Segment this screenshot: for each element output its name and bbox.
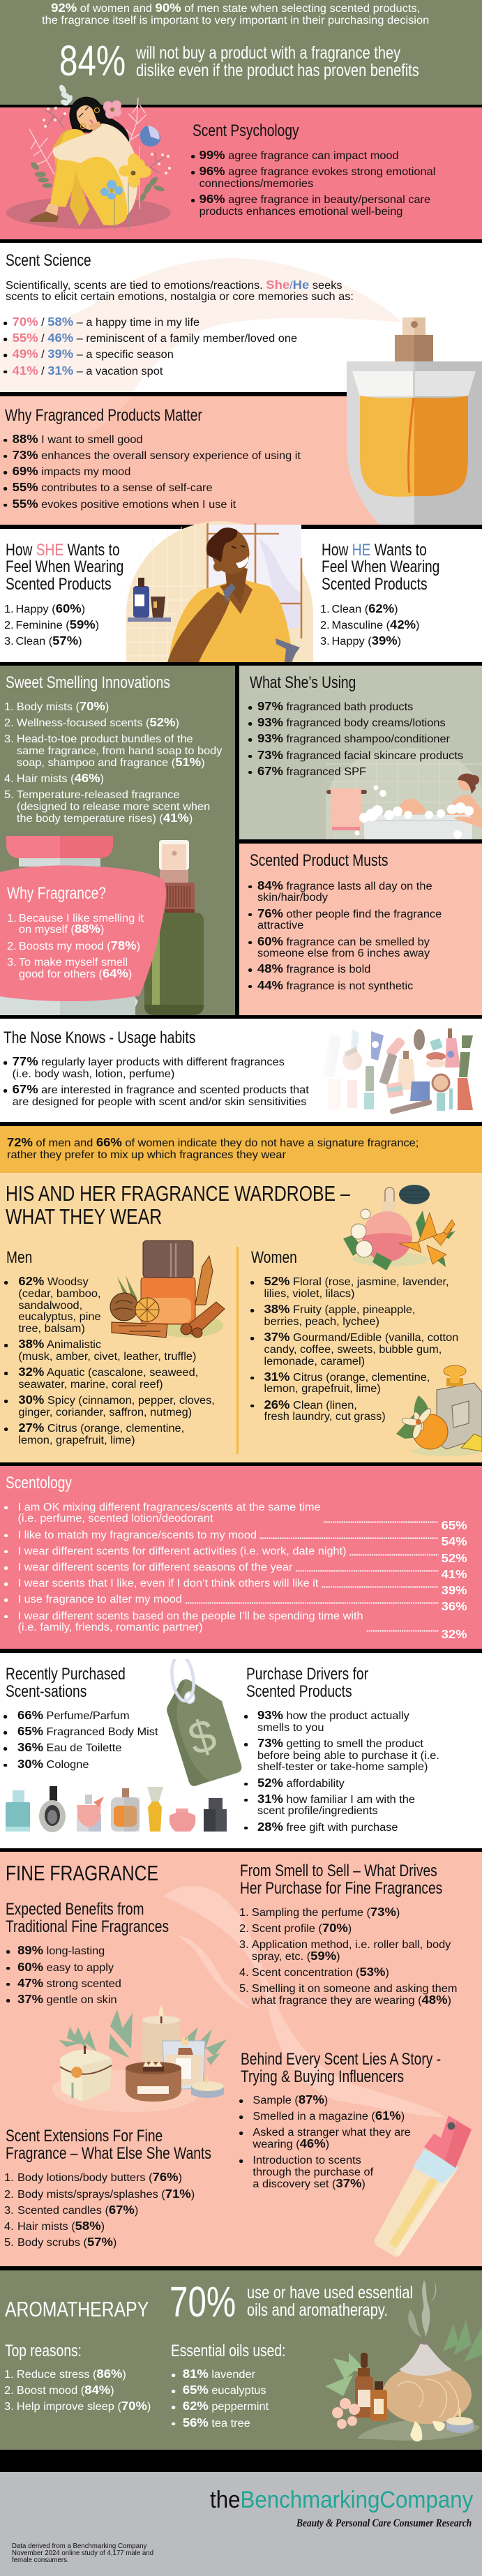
heading: behind every scent (241, 2051, 441, 2085)
list: recently purchased: 30% Cologne (17, 1757, 89, 1771)
illustration: row of perfume bottles (6, 1786, 227, 1832)
list: purchase factors: Scent concentration (53%) (252, 1965, 389, 1979)
list: innovations: 2. (4, 717, 14, 729)
list: psychology statistics: 96% agree fragrance in beauty/personal care (199, 192, 430, 206)
list: products used: 67% fragranced SPF (257, 764, 366, 778)
list: men's scents: 62% Woodsy (18, 1274, 89, 1288)
icon: dollar price tag (167, 1659, 241, 1786)
heading: purchase drivers: Scented Products (246, 1682, 352, 1701)
callout: signature fragrance statistic (0, 1126, 482, 1173)
list: why fragrance reasons: 1. (7, 913, 17, 924)
list: she and he memory statistics: 41% / 31% – a vacation spot (13, 364, 163, 377)
list: product musts: 44% fragrance is not synthetic (257, 978, 413, 992)
panel: why fragrance (0, 865, 166, 1001)
list: usage habits: (i.e. body wash, lotion, perfume) (13, 1068, 174, 1080)
list: why fragrance reasons: To make myself smell (19, 957, 128, 968)
heading: how she wants to feel (6, 541, 123, 594)
list: purchase drivers: scent profile/ingredients (257, 1805, 378, 1817)
heading: how he wants to feel: Scented Products (322, 575, 428, 594)
list: essential oils: 56% tea tree (183, 2416, 250, 2429)
list: scent extensions: 5. (4, 2237, 14, 2249)
list: psychology statistics: 99% agree fragrance can impact mood (199, 148, 399, 162)
list: products used: 73% fragranced facial skincare products (257, 748, 463, 762)
list: she feelings: 1. (4, 604, 14, 615)
heading: expected benefits (6, 1901, 169, 1935)
list: purchase factors (239, 1908, 457, 2012)
list: men's scents: 27% Citrus (orange, clementine, (18, 1421, 184, 1435)
list: scentology statements: 36% (441, 1599, 467, 1613)
list: usage habits: 67% are interested in fragrance and scented products that (13, 1082, 309, 1096)
panel: purchases and purchase drivers (0, 1653, 482, 1848)
list: product musts (248, 878, 442, 992)
heading: why fragranced products matter: Why Fragranced Products Matter (5, 406, 202, 425)
list: innovations: 3. (4, 733, 14, 745)
list: top reasons: 1. (4, 2369, 14, 2381)
background: scent swoosh (0, 258, 402, 392)
list: reasons: 69% impacts my mood (13, 464, 130, 478)
heading: from smell to sell (240, 1863, 442, 1897)
list: he feelings: 1. (320, 604, 330, 615)
list: purchase drivers: smells to you (257, 1722, 324, 1734)
heading: from smell to sell: Her Purchase for Fine Fragrances (240, 1879, 442, 1898)
heading: the nose knows: The Nose Knows - Usage habits (3, 1028, 195, 1047)
list: purchase factors: 4. (239, 1967, 249, 1979)
list: purchase factors: Smelling it on someone and asking them (252, 1983, 457, 1995)
list: scentology statements: (i.e. perfume, scented lotion/deodorant (17, 1513, 213, 1525)
list: usage habits: are designed for people with scent and/or skin sensitivities (13, 1096, 306, 1108)
list: product musts: attractive (257, 920, 303, 931)
heading: scent science: Scent Science (6, 251, 91, 270)
heading: fine fragrance: FINE FRAGRANCE (6, 1861, 158, 1885)
list: women's scents (250, 1274, 458, 1423)
list: she feelings: 2. (4, 620, 14, 631)
list: he feelings: 2. (320, 620, 330, 631)
text: signature fragrance: rather they prefer to mix up which fragrances they wear (7, 1149, 286, 1161)
list: she and he memory statistics (3, 315, 297, 377)
panel: scented product musts (239, 844, 482, 1015)
list: top reasons: 2. (4, 2385, 14, 2397)
list: men's scents: 30% Spicy (cinnamon, pepper, cloves, (18, 1393, 215, 1407)
list: influencers: a discovery set (37%) (253, 2176, 365, 2190)
list: product musts: someone else from 6 inches away (257, 948, 430, 959)
list: he feelings: Clean (62%) (331, 601, 398, 615)
text: essential oil use: oils and aromatherapy. (247, 2300, 387, 2320)
list: innovations: (designed to release more scent when (17, 801, 210, 813)
list: innovations: Hair mists (46%) (17, 771, 104, 785)
list: purchase factors: Sampling the perfume (73%) (252, 1905, 400, 1919)
list: he feelings (320, 601, 419, 647)
list: psychology statistics: 96% agree fragrance evokes strong emotional (199, 164, 435, 178)
heading: recently purchased scent-sations: Scent-sations (6, 1682, 86, 1701)
heading: how he wants to feel: Feel When Wearing (322, 557, 439, 576)
list: top reasons: 3. (4, 2401, 14, 2413)
text: source note: Data derived from a Benchmarking Company (12, 2542, 146, 2550)
list: why fragrance reasons (7, 913, 144, 980)
list: she feelings: Clean (57%) (15, 634, 82, 647)
list: she feelings (4, 601, 99, 647)
list: why fragrance reasons: 2. (7, 941, 17, 952)
text: essential oil use (247, 2284, 412, 2319)
list: scent extensions: 2. (4, 2188, 14, 2201)
list: women's scents: lemonade, caramel) (264, 1356, 365, 1368)
big number: 84%: 84% (59, 37, 126, 84)
list: purchase factors: spray, etc. (59%) (252, 1949, 340, 1963)
list: why fragrance reasons: on myself (88%) (19, 922, 104, 936)
text: source note: November 2024 online study of 4,177 male and (12, 2549, 153, 2557)
list: influencers (239, 2095, 410, 2195)
list: women's scents: lilies, violet, lilacs) (264, 1288, 354, 1300)
list: she and he memory statistics: 55% / 46% – reminiscent of a family member/loved one (13, 331, 297, 345)
list: she feelings: Feminine (59%) (15, 617, 99, 631)
icon: dollar price tag: $ (182, 1708, 222, 1765)
list: innovations: 4. (4, 773, 14, 785)
list: women's scents: berries, peach, lychee) (264, 1316, 379, 1328)
background: salmon swoosh (0, 396, 133, 442)
list: top reasons: Help improve sleep (70%) (17, 2399, 151, 2413)
list: scentology statements (4, 1502, 467, 1641)
list: innovations (4, 699, 222, 825)
heading: top reasons: Top reasons: (5, 2342, 82, 2360)
text: source note: female consumers. (12, 2556, 68, 2564)
list: psychology statistics: connections/memories (199, 178, 313, 190)
list: essential oils: 81% lavender (183, 2367, 255, 2381)
list: he feelings: Happy (39%) (331, 634, 401, 647)
list: expected benefits: 37% gentle on skin (17, 1992, 116, 2006)
list: innovations: the body temperature rises) (41%) (17, 811, 193, 825)
list: recently purchased (3, 1708, 158, 1771)
list: why fragrance reasons: 3. (7, 957, 17, 968)
list: usage habits (3, 1054, 309, 1108)
list: purchase factors: 3. (239, 1939, 249, 1951)
heading: recently purchased scent-sations (6, 1665, 125, 1701)
list: scentology statements: I like to match my fragrance/scents to my mood (17, 1529, 257, 1541)
illustration: man applying scent in bathroom (126, 521, 313, 662)
illustration: assorted cosmetics (331, 1028, 473, 1114)
list: recently purchased: 36% Eau de Toilette (17, 1740, 121, 1754)
list: scent extensions: Body scrubs (57%) (17, 2235, 116, 2249)
list: men's scents (4, 1274, 215, 1446)
heading: how he wants to feel (322, 541, 439, 594)
panel: scent psychology (0, 107, 482, 239)
heading: expected benefits: Traditional Fine Fragrances (6, 1917, 169, 1936)
list: scentology statements: 54% (441, 1534, 467, 1548)
list: influencers: wearing (46%) (253, 2136, 329, 2150)
heading: purchase drivers (246, 1665, 368, 1701)
list: products used: 97% fragranced bath products (257, 699, 413, 713)
list: women's scents: 31% Citrus (orange, clementine, (264, 1370, 430, 1384)
list: innovations: same fragrance, from hand soap to body (17, 745, 222, 757)
list: scentology statements: (i.e. family, friends, romantic partner) (17, 1622, 202, 1633)
list: top reasons: Boost mood (84%) (17, 2383, 114, 2397)
list: product musts: 84% fragrance lasts all day on the (257, 878, 432, 892)
list: why fragrance reasons: Boosts my mood (78%) (19, 938, 140, 952)
list: influencers: Asked a stranger what they are (253, 2127, 410, 2139)
list: men's scents: ginger, coriander, saffron, nutmeg) (18, 1407, 192, 1418)
list: scent extensions: 1. (4, 2172, 14, 2184)
list: products used (248, 699, 463, 778)
list: influencers: Introduction to scents (253, 2155, 361, 2166)
list: men's scents: 32% Aquatic (cascalone, seaweed, (18, 1365, 198, 1379)
list: top reasons: Reduce stress (86%) (17, 2367, 126, 2381)
list: purchase drivers: 31% how familiar I am with the (257, 1792, 415, 1806)
heading: purchase drivers: Purchase Drivers for (246, 1665, 368, 1684)
list: product musts: 48% fragrance is bold (257, 961, 370, 975)
heading: recently purchased scent-sations: Recently Purchased (6, 1665, 125, 1684)
list: why fragrance reasons: good for others (64%) (19, 966, 132, 980)
panel: his and her fragrance wardrobe (0, 1173, 482, 1462)
panel: aromatherapy (0, 2270, 482, 2450)
logo: the Benchmarking Company: theBenchmarkingCompany (210, 2487, 473, 2513)
heading: scent extensions: Fragrance – What Else She Wants (6, 2144, 211, 2163)
list: essential oils (172, 2369, 269, 2434)
heading: his and her fragrance wardrobe: HIS AND HER FRAGRANCE WARDROBE – (6, 1181, 349, 1206)
list: purchase drivers: 73% getting to smell the product (257, 1736, 423, 1750)
list: men's scents: tree, balsam) (18, 1323, 85, 1335)
list: innovations: Body mists (70%) (17, 699, 109, 713)
list: influencers: Sample (87%) (253, 2092, 328, 2106)
list: purchase drivers: 28% free gift with purchase (257, 1820, 398, 1834)
heading: sweet smelling innovations: Sweet Smelling Innovations (6, 673, 170, 692)
text: signature fragrance (7, 1135, 419, 1161)
list: reasons: 73% enhances the overall sensory experience of using it (13, 448, 301, 462)
panel: scentology (0, 1466, 482, 1649)
list: scentology statements: 39% (441, 1583, 467, 1597)
list: expected benefits: 47% strong scented (17, 1976, 121, 1990)
list: purchase factors: Application method, i.e. roller ball, body (252, 1939, 451, 1951)
list: scentology statements: I wear different scents based on the people I’ll be spending time with (17, 1610, 363, 1622)
list: women's scents: 26% Clean (linen, (264, 1398, 356, 1411)
illustration: diffuser and oil bottles (314, 2270, 482, 2450)
list: innovations: Head-to-toe product bundles of the (17, 733, 193, 745)
list: scent extensions: Body lotions/body butters (76%) (17, 2170, 182, 2184)
heading: behind every scent: Behind Every Scent Lies A Story - (241, 2050, 441, 2069)
list: scent extensions: Scented candles (67%) (17, 2203, 138, 2217)
list: scentology statements: I am OK mixing different fragrances/scents at the same time (17, 1502, 320, 1513)
list: expected benefits (6, 1946, 121, 2011)
list: reasons: 88% I want to smell good (13, 432, 143, 446)
list: scentology statements: 41% (441, 1567, 467, 1581)
list: women's scents: lemon, grapefruit, lime) (264, 1383, 380, 1395)
list: product musts: 76% other people find the fragrance (257, 906, 442, 920)
text: signature fragrance: 72% of men and 66% of women indicate they do not have a signature fragrance; (7, 1135, 419, 1149)
list: expected benefits: 60% easy to apply (17, 1959, 114, 1973)
list: scent extensions: 3. (4, 2205, 14, 2217)
list: men's scents: 38% Animalistic (18, 1337, 101, 1351)
list: scentology statements: I wear scents that I like, even if I don’t think others will like it (17, 1578, 318, 1589)
heading: why fragrance: Why Fragrance? (7, 884, 106, 903)
list: products used: 93% fragranced shampoo/conditioner (257, 731, 450, 745)
tagline: Beauty & Personal Care Consumer Research (296, 2517, 472, 2529)
heading: scent extensions: Scent Extensions For Fine (6, 2127, 163, 2146)
list: he feelings: Masculine (42%) (331, 617, 419, 631)
heading: his and her fragrance wardrobe (6, 1181, 350, 1229)
list: influencers: through the purchase of (253, 2166, 373, 2178)
list: men's scents: lemon, grapefruit, lime) (18, 1435, 135, 1446)
list: usage habits: 77% regularly layer products with different fragrances (13, 1054, 285, 1068)
panel: how she and he want to feel (0, 529, 482, 662)
divider: men and women (236, 1247, 239, 1454)
illustration: orange perfume with spices (110, 1241, 225, 1338)
text: fragrance importance statistic: 92% of women and 90% of men state when selecting scented products, (51, 1, 420, 15)
list: reasons (3, 432, 301, 511)
illustration: scented candles (49, 2002, 230, 2114)
heading: what she's using: What She’s Using (250, 673, 356, 692)
heading: scented product musts: Scented Product Musts (250, 851, 388, 870)
list: women's scents: 37% Gourmand/Edible (vanilla, cotton (264, 1330, 458, 1344)
list: recently purchased: 65% Fragranced Body Mist (17, 1724, 158, 1738)
list: purchase drivers: 93% how the product actually (257, 1708, 409, 1722)
list: innovations: 1. (4, 701, 14, 713)
list: men's scents: eucalyptus, pine (18, 1311, 101, 1323)
list: purchase drivers: before being able to purchase it (i.e. (257, 1750, 439, 1762)
text: scent science intro (6, 278, 353, 303)
list: scentology statements: 52% (441, 1550, 467, 1564)
list: innovations: Wellness-focused scents (52%) (17, 715, 179, 729)
illustration: woman hugging knees with flowers (6, 85, 171, 230)
illustration: woman in bubble bath (326, 748, 482, 839)
list: purchase factors: 5. (239, 1983, 249, 1995)
heading: how he wants to feel: How HE Wants to (322, 541, 427, 560)
list: product musts: skin/hair/body (257, 892, 328, 904)
list: scentology statements: I use fragrance to alter my mood (17, 1594, 181, 1605)
text: scent science intro: Scientifically, scents are tied to emotions/reactions. She/He seeks (6, 278, 342, 292)
text: scent science intro: scents to elicit certain emotions, nostalgia or core memories such as: (6, 291, 353, 303)
shape: pink jar label (0, 865, 166, 1001)
heading: his and her fragrance wardrobe: WHAT THEY WEAR (6, 1204, 162, 1229)
list: scentology statements: I wear different scents for different activities (i.e. work, date night) (17, 1545, 346, 1557)
list: men's scents: sandalwood, (18, 1300, 82, 1312)
list: innovations: Temperature-released fragrance (17, 789, 180, 801)
list: innovations: soap, shampoo and fragrance (51%) (17, 755, 205, 769)
heading: scent psychology: Scent Psychology (193, 121, 299, 140)
list: women's scents: candy, coffee, sweets, bubble gum, (264, 1344, 442, 1356)
list: scent extensions: Hair mists (58%) (17, 2219, 105, 2233)
list: psychology statistics (191, 148, 435, 218)
list: women's scents: 38% Fruity (apple, pineapple, (264, 1302, 415, 1316)
text: fragrance importance statistic (42, 1, 429, 27)
list: why fragrance reasons: Because I like smelling it (19, 913, 144, 924)
heading: essential oils used: Essential oils used: (171, 2342, 285, 2360)
list: innovations: 5. (4, 789, 14, 801)
list: products used: 93% fragranced body creams/lotions (257, 715, 446, 729)
list: scentology statements: 65% (441, 1518, 467, 1532)
list: recently purchased: 66% Perfume/Parfum (17, 1708, 130, 1722)
text: 84% description: will not buy a product with a fragrance they (136, 43, 400, 63)
list: purchase factors: Scent profile (70%) (252, 1921, 352, 1935)
big number: 70%: 70% (170, 2278, 236, 2326)
panel: why fragranced products matter (0, 396, 482, 525)
heading: scentology: Scentology (6, 1474, 71, 1492)
list: purchase factors: what fragrance they are wearing (48%) (252, 1993, 451, 2007)
list: purchase drivers: shelf-tester or take-home sample) (257, 1761, 428, 1773)
list: purchase drivers: 52% affordability (257, 1776, 345, 1790)
heading: women: Women (251, 1248, 297, 1267)
list: reasons: 55% evokes positive emotions when I use it (13, 497, 236, 511)
heading: behind every scent: Trying & Buying Influencers (241, 2067, 404, 2086)
heading: how she wants to feel: Feel When Wearing (6, 557, 123, 576)
panel: the nose knows (0, 1019, 482, 1122)
list: psychology statistics: products enhances emotional well-being (199, 206, 402, 218)
illustration: jar and dropper bottle (0, 836, 204, 1015)
list: men's scents: seawater, marine, coral reef) (18, 1379, 163, 1391)
list: he feelings: 3. (320, 636, 330, 647)
list: purchase factors: 1. (239, 1907, 249, 1919)
list: scent extensions: Body mists/sprays/splashes (71%) (17, 2187, 195, 2201)
list: scentology statements: 32% (441, 1627, 467, 1641)
heading: expected benefits: Expected Benefits from (6, 1900, 144, 1919)
list: men's scents: (musk, amber, civet, leather, truffle) (18, 1351, 196, 1363)
heading: scent extensions (6, 2128, 211, 2162)
list: purchase factors: 2. (239, 1923, 249, 1935)
list: scentology statements: I wear different scents for different seasons of the year (17, 1562, 292, 1573)
heading: from smell to sell: From Smell to Sell – What Drives (240, 1862, 437, 1880)
list: scent extensions: 4. (4, 2221, 14, 2233)
list: she and he memory statistics: 70% / 58% – a happy time in my life (13, 315, 199, 329)
heading: how she wants to feel: How SHE Wants to (6, 541, 119, 560)
text: 84% description (136, 43, 419, 80)
list: she feelings: 3. (4, 636, 14, 647)
panel: sweet smelling innovations (0, 666, 235, 1015)
list: men's scents: (cedar, bamboo, (18, 1288, 101, 1300)
panel: scent science (0, 243, 482, 392)
list: influencers: Smelled in a magazine (61%) (253, 2109, 405, 2122)
list: women's scents: 52% Floral (rose, jasmine, lavender, (264, 1274, 449, 1288)
list: purchase drivers (244, 1708, 439, 1834)
list: product musts: 60% fragrance can be smelled by (257, 934, 430, 948)
text: fragrance importance statistic: the fragrance itself is important to very important in their purchasing decision (42, 15, 429, 27)
illustration: pink floral perfume (343, 1185, 455, 1270)
panel: what she's using (239, 666, 482, 839)
list: she feelings: Happy (60%) (15, 601, 85, 615)
panel: fine fragrance (0, 1852, 482, 2266)
list: essential oils: 62% peppermint (183, 2399, 269, 2413)
list: reasons: 55% contributes to a sense of self-care (13, 480, 213, 494)
text: 84% description: dislike even if the product has proven benefits (136, 60, 419, 80)
text: essential oil use: use or have used essential (247, 2283, 412, 2302)
footer (0, 2472, 482, 2576)
list: scent extensions (4, 2173, 195, 2254)
text: source note (12, 2543, 153, 2563)
list: she and he memory statistics: 49% / 39% – a specific season (13, 347, 174, 361)
background: scent swoosh (163, 1886, 446, 2118)
heading: aromatherapy: AROMATHERAPY (5, 2297, 149, 2321)
list: expected benefits: 89% long-lasting (17, 1943, 105, 1957)
illustration: perfume bottle (347, 317, 482, 525)
heading: men: Men (6, 1248, 32, 1267)
illustration: citrus perfume (396, 1365, 482, 1456)
heading: how she wants to feel: Scented Products (6, 575, 111, 594)
panel: intro statistics (0, 0, 482, 105)
list: essential oils: 65% eucalyptus (183, 2383, 266, 2397)
list: women's scents: fresh laundry, cut grass) (264, 1411, 385, 1423)
illustration: spray sample vial (370, 2111, 478, 2261)
list: top reasons (4, 2369, 151, 2418)
